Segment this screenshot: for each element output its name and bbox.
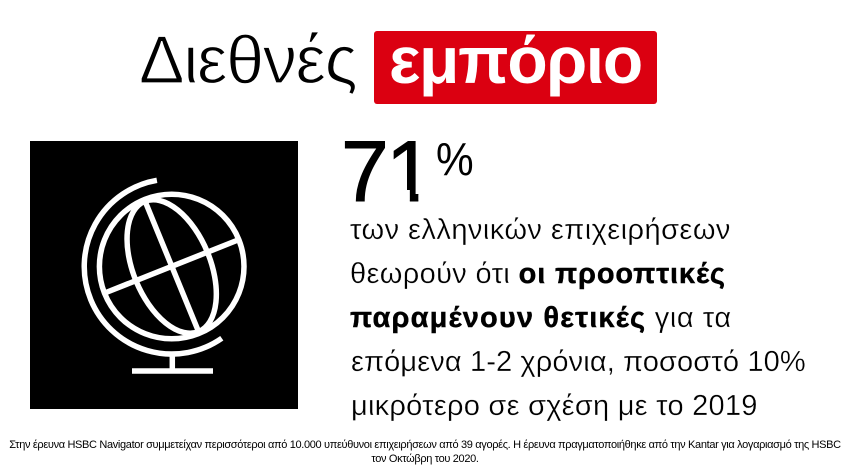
footnote: τον Οκτώβρη του 2020. [371,453,479,465]
big number: 7 [341,124,389,220]
footnote: Στην έρευνα HSBC Navigator συμμετείχαν περισσότεροι από 10.000 υπεύθυνοι επιχειρήσεων από 39 αγορές. Η έρευνα πραγματοποιήθηκε από την Kantar για λογαριασμό της HSBC [9,439,841,451]
percent sign: % [436,133,474,185]
line 5: μικρότερο σε σχέση με το 2019 [351,390,758,422]
text block: statistic description [350,214,806,422]
line 4: επόμενα 1-2 χρόνια, ποσοστό 10% [351,346,806,378]
title: red highlight box [374,30,657,104]
big number [341,124,418,220]
title [139,22,657,104]
line 2: θεωρούν ότι οι προοπτικές [350,258,726,290]
title: highlighted word: εμπόριο [389,23,642,97]
line 1: των ελληνικών επιχειρήσεων [350,214,731,246]
footnote [9,439,841,465]
line 3: παραμένουν θετικές για τα [350,302,732,334]
panel: globe icon [30,141,298,409]
big number: 1 [386,124,434,220]
title: plain word: Διεθνές [139,22,356,98]
